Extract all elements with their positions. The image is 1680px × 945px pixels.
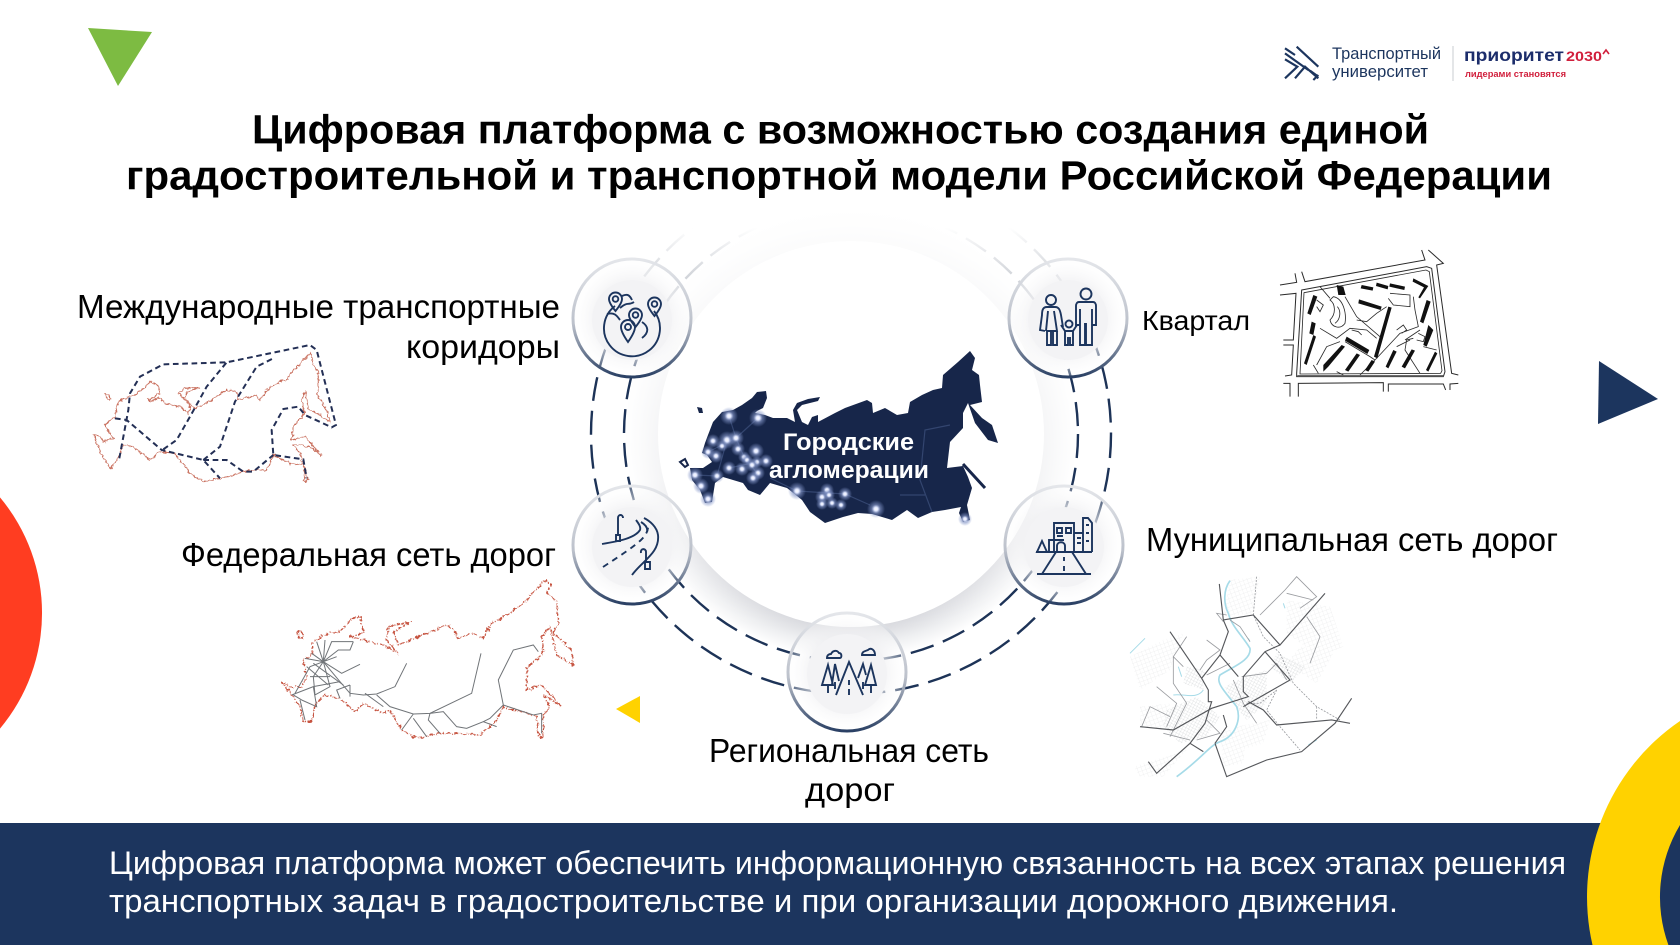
logo text: university: Транспортный [1332, 45, 1441, 63]
icon circle: quarter (family) [1009, 259, 1127, 377]
bottom banner [0, 721, 1680, 945]
icon: university logo [1285, 47, 1318, 80]
center map label: Городские [783, 429, 914, 456]
icon: family [1040, 288, 1096, 345]
map: municipal road network [1130, 577, 1352, 777]
label: quarter: Квартал [1142, 305, 1250, 336]
logo block: 2030 [1566, 49, 1602, 64]
label: international corridors: Международные транспортные [77, 288, 560, 325]
title: Цифровая платформа с возможностью создания единой [252, 106, 1429, 152]
logo block: лидерами становятся [1465, 69, 1566, 80]
banner text: транспортных задач в градостроительстве и при организации дорожного движения. [109, 883, 1398, 919]
logo block: университет [1332, 63, 1428, 81]
label: international corridors [77, 288, 560, 365]
label: federal roads: Федеральная сеть дорог [181, 536, 556, 573]
icon: globe with pins [604, 292, 661, 356]
label: regional roads: Региональная сеть [709, 732, 989, 769]
decorative shape: yellow triangle [616, 696, 640, 723]
logo block [1285, 45, 1609, 81]
icon circle: regional roads [788, 613, 906, 731]
decorative shape: navy triangle [1598, 361, 1658, 424]
label: regional roads: дорог [805, 771, 895, 808]
decorative shape: yellow ring [1587, 721, 1680, 945]
logo text: priority 2030: приоритет [1464, 45, 1564, 65]
center map of Russia [680, 351, 998, 526]
label: international corridors: коридоры [406, 328, 560, 365]
banner text [109, 845, 1566, 919]
central ring diagram [591, 174, 1111, 694]
label: municipal roads: Муниципальная сеть дорог [1146, 521, 1558, 558]
icon circle: international corridors [573, 259, 691, 377]
center map label: агломерации [769, 457, 929, 484]
icon: city road [1036, 518, 1092, 574]
icon circle: municipal roads [1005, 486, 1123, 604]
icon: forest road [822, 649, 876, 695]
label: regional roads [709, 732, 989, 808]
decorative shape: green triangle [88, 28, 152, 86]
map: quarter plan [1280, 250, 1458, 397]
map: federal roads [282, 580, 573, 738]
banner text: Цифровая платформа может обеспечить информационную связанность на всех этапах решения [109, 845, 1566, 881]
title: градостроительной и транспортной модели Российской Федерации [126, 152, 1552, 198]
center map label [769, 429, 929, 484]
map: international corridors [93, 345, 336, 482]
icon: curved road [602, 515, 658, 575]
title [126, 106, 1552, 198]
decorative shape: red circle [0, 497, 42, 729]
icon circle: federal roads [573, 486, 691, 604]
